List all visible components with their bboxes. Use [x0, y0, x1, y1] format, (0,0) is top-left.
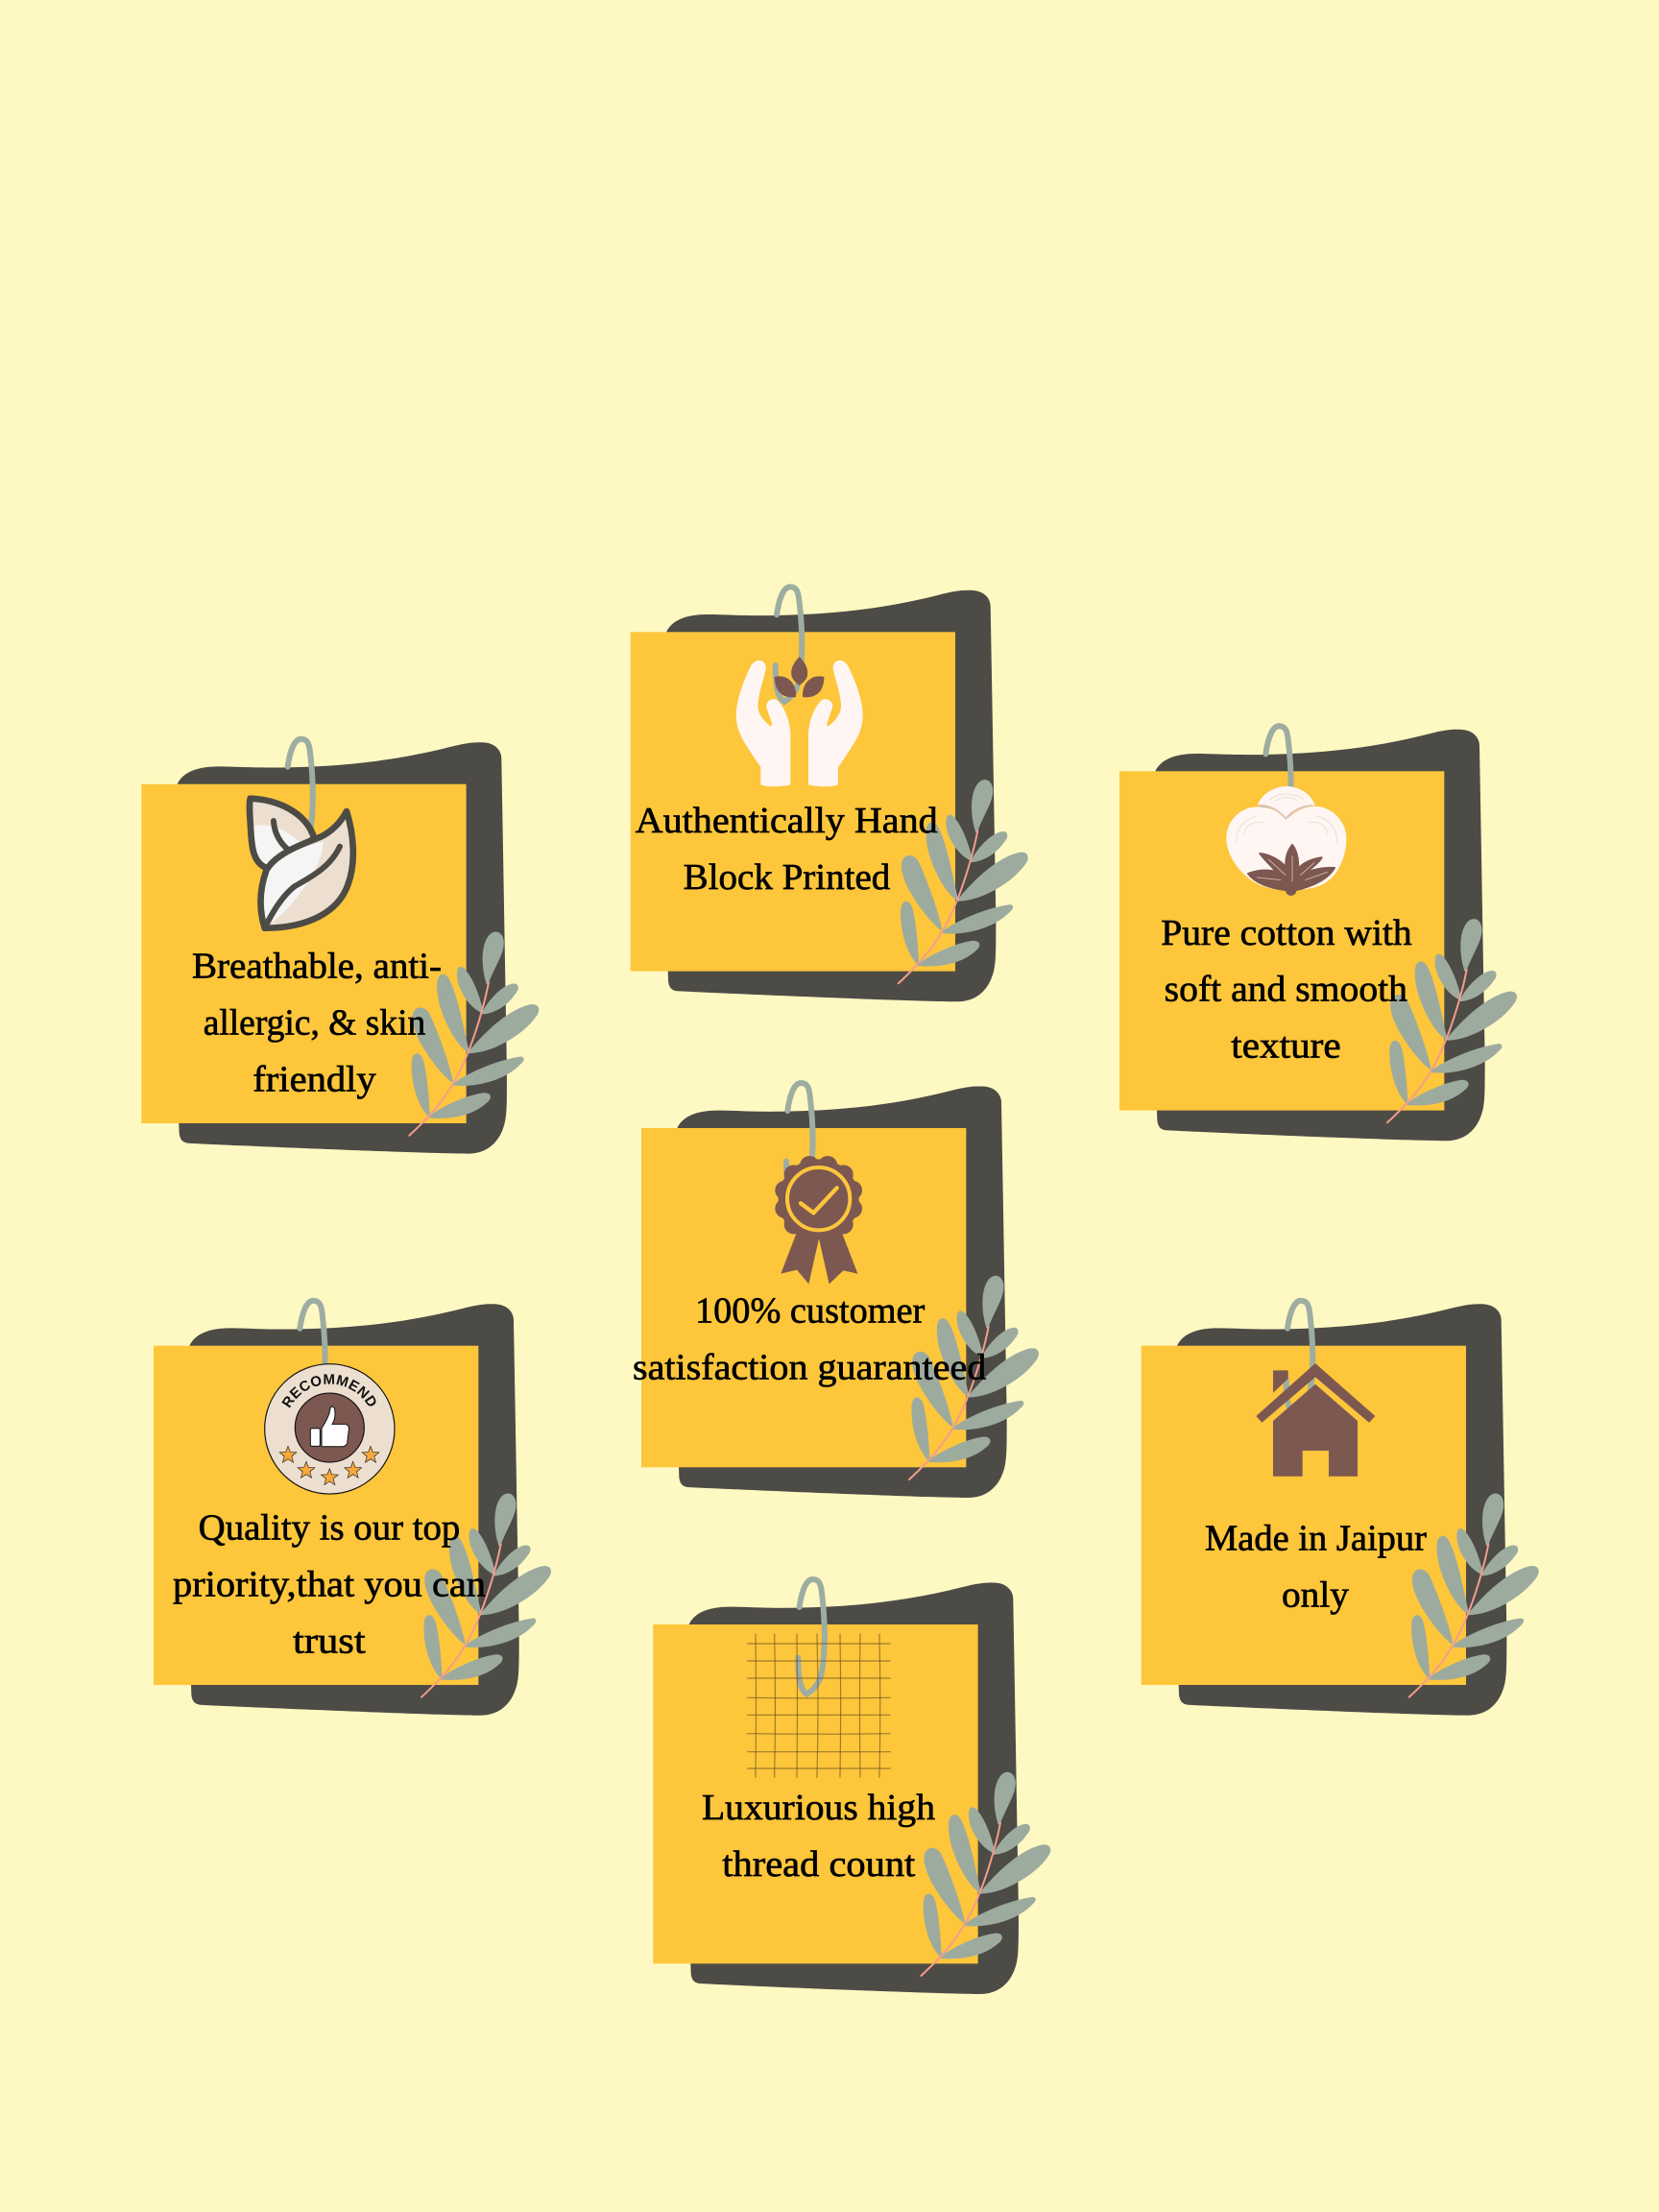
- text: breathable: Breathable, anti-: [192, 946, 442, 986]
- leaf sprig: [921, 1773, 1049, 1976]
- text: authentically hand block printed: Authentically Hand: [636, 801, 938, 841]
- dark backing shape: [1155, 730, 1485, 1141]
- text: pure cotton: Pure cotton with: [1161, 913, 1412, 953]
- icon: recommend badge: [264, 1363, 396, 1495]
- paper clip: [786, 1083, 813, 1198]
- text: thread count: thread count: [722, 1844, 916, 1885]
- text: made in jaipur: only: [1282, 1575, 1349, 1615]
- card: made in jaipur: [1142, 1301, 1538, 1716]
- text: authentically hand block printed: Block Printed: [684, 857, 890, 898]
- text: pure cotton: texture: [1231, 1026, 1341, 1067]
- dark backing shape: [688, 1583, 1019, 1994]
- paper clip: [286, 739, 313, 854]
- dark backing shape: [677, 1087, 1007, 1498]
- text: pure cotton: soft and smooth: [1165, 970, 1407, 1010]
- text: thread count: Luxurious high: [702, 1788, 935, 1828]
- paper clip: [798, 1579, 825, 1695]
- dark backing shape: [189, 1304, 519, 1716]
- paper clip: [776, 587, 802, 702]
- yellow panel: [141, 784, 467, 1123]
- yellow panel: [1119, 771, 1444, 1111]
- text: quality: [173, 1507, 486, 1662]
- icon: thread grid: [747, 1634, 891, 1778]
- yellow panel: [154, 1346, 478, 1685]
- icon: award seal: [775, 1156, 862, 1284]
- leaf sprig: [1409, 1495, 1538, 1697]
- paper clip: [1286, 1301, 1312, 1415]
- leaf sprig: [409, 933, 538, 1136]
- yellow panel: [1142, 1346, 1466, 1685]
- paper clip: [1264, 726, 1291, 841]
- leaf sprig: [1387, 920, 1516, 1122]
- text: customer satisfaction: satisfaction guaranteed: [633, 1348, 986, 1388]
- yellow panel: [653, 1624, 978, 1963]
- text: customer satisfaction: [633, 1290, 986, 1388]
- text: breathable: allergic, & skin: [204, 1002, 425, 1043]
- text: breathable: [192, 946, 442, 1100]
- yellow panel: [631, 632, 955, 972]
- card: thread count: [653, 1579, 1049, 1994]
- icon: cotton boll: [1226, 786, 1346, 895]
- card: pure cotton: [1119, 726, 1516, 1141]
- leaf sprig: [899, 781, 1027, 983]
- text: quality: priority,that you can: [173, 1565, 486, 1605]
- text: made in jaipur: [1205, 1518, 1427, 1615]
- icon: hands holding seedling: [737, 657, 862, 785]
- leaf sprig: [909, 1277, 1038, 1479]
- card: quality: [154, 1298, 551, 1716]
- text: quality: trust: [293, 1622, 366, 1662]
- text: customer satisfaction: 100% customer: [695, 1290, 926, 1331]
- dark backing shape: [177, 742, 507, 1154]
- text: authentically hand block printed: [636, 801, 938, 898]
- card: customer satisfaction: [633, 1083, 1038, 1498]
- card: authentically hand block printed: [631, 587, 1027, 1001]
- icon: house: [1256, 1363, 1375, 1477]
- dark backing shape: [665, 590, 996, 1001]
- leaf sprig: [421, 1495, 550, 1697]
- icon: recommend badge: RECOMMEND: [281, 1374, 376, 1407]
- card: breathable: [141, 739, 538, 1154]
- paper clip: [299, 1301, 325, 1415]
- text: breathable: friendly: [252, 1060, 376, 1100]
- icon: two leaves: [250, 799, 353, 928]
- text: thread count: [702, 1788, 935, 1885]
- text: made in jaipur: Made in Jaipur: [1205, 1518, 1427, 1558]
- dark backing shape: [1176, 1304, 1506, 1716]
- text: pure cotton: [1161, 913, 1412, 1067]
- text: quality: Quality is our top: [199, 1507, 460, 1548]
- yellow panel: [641, 1128, 966, 1467]
